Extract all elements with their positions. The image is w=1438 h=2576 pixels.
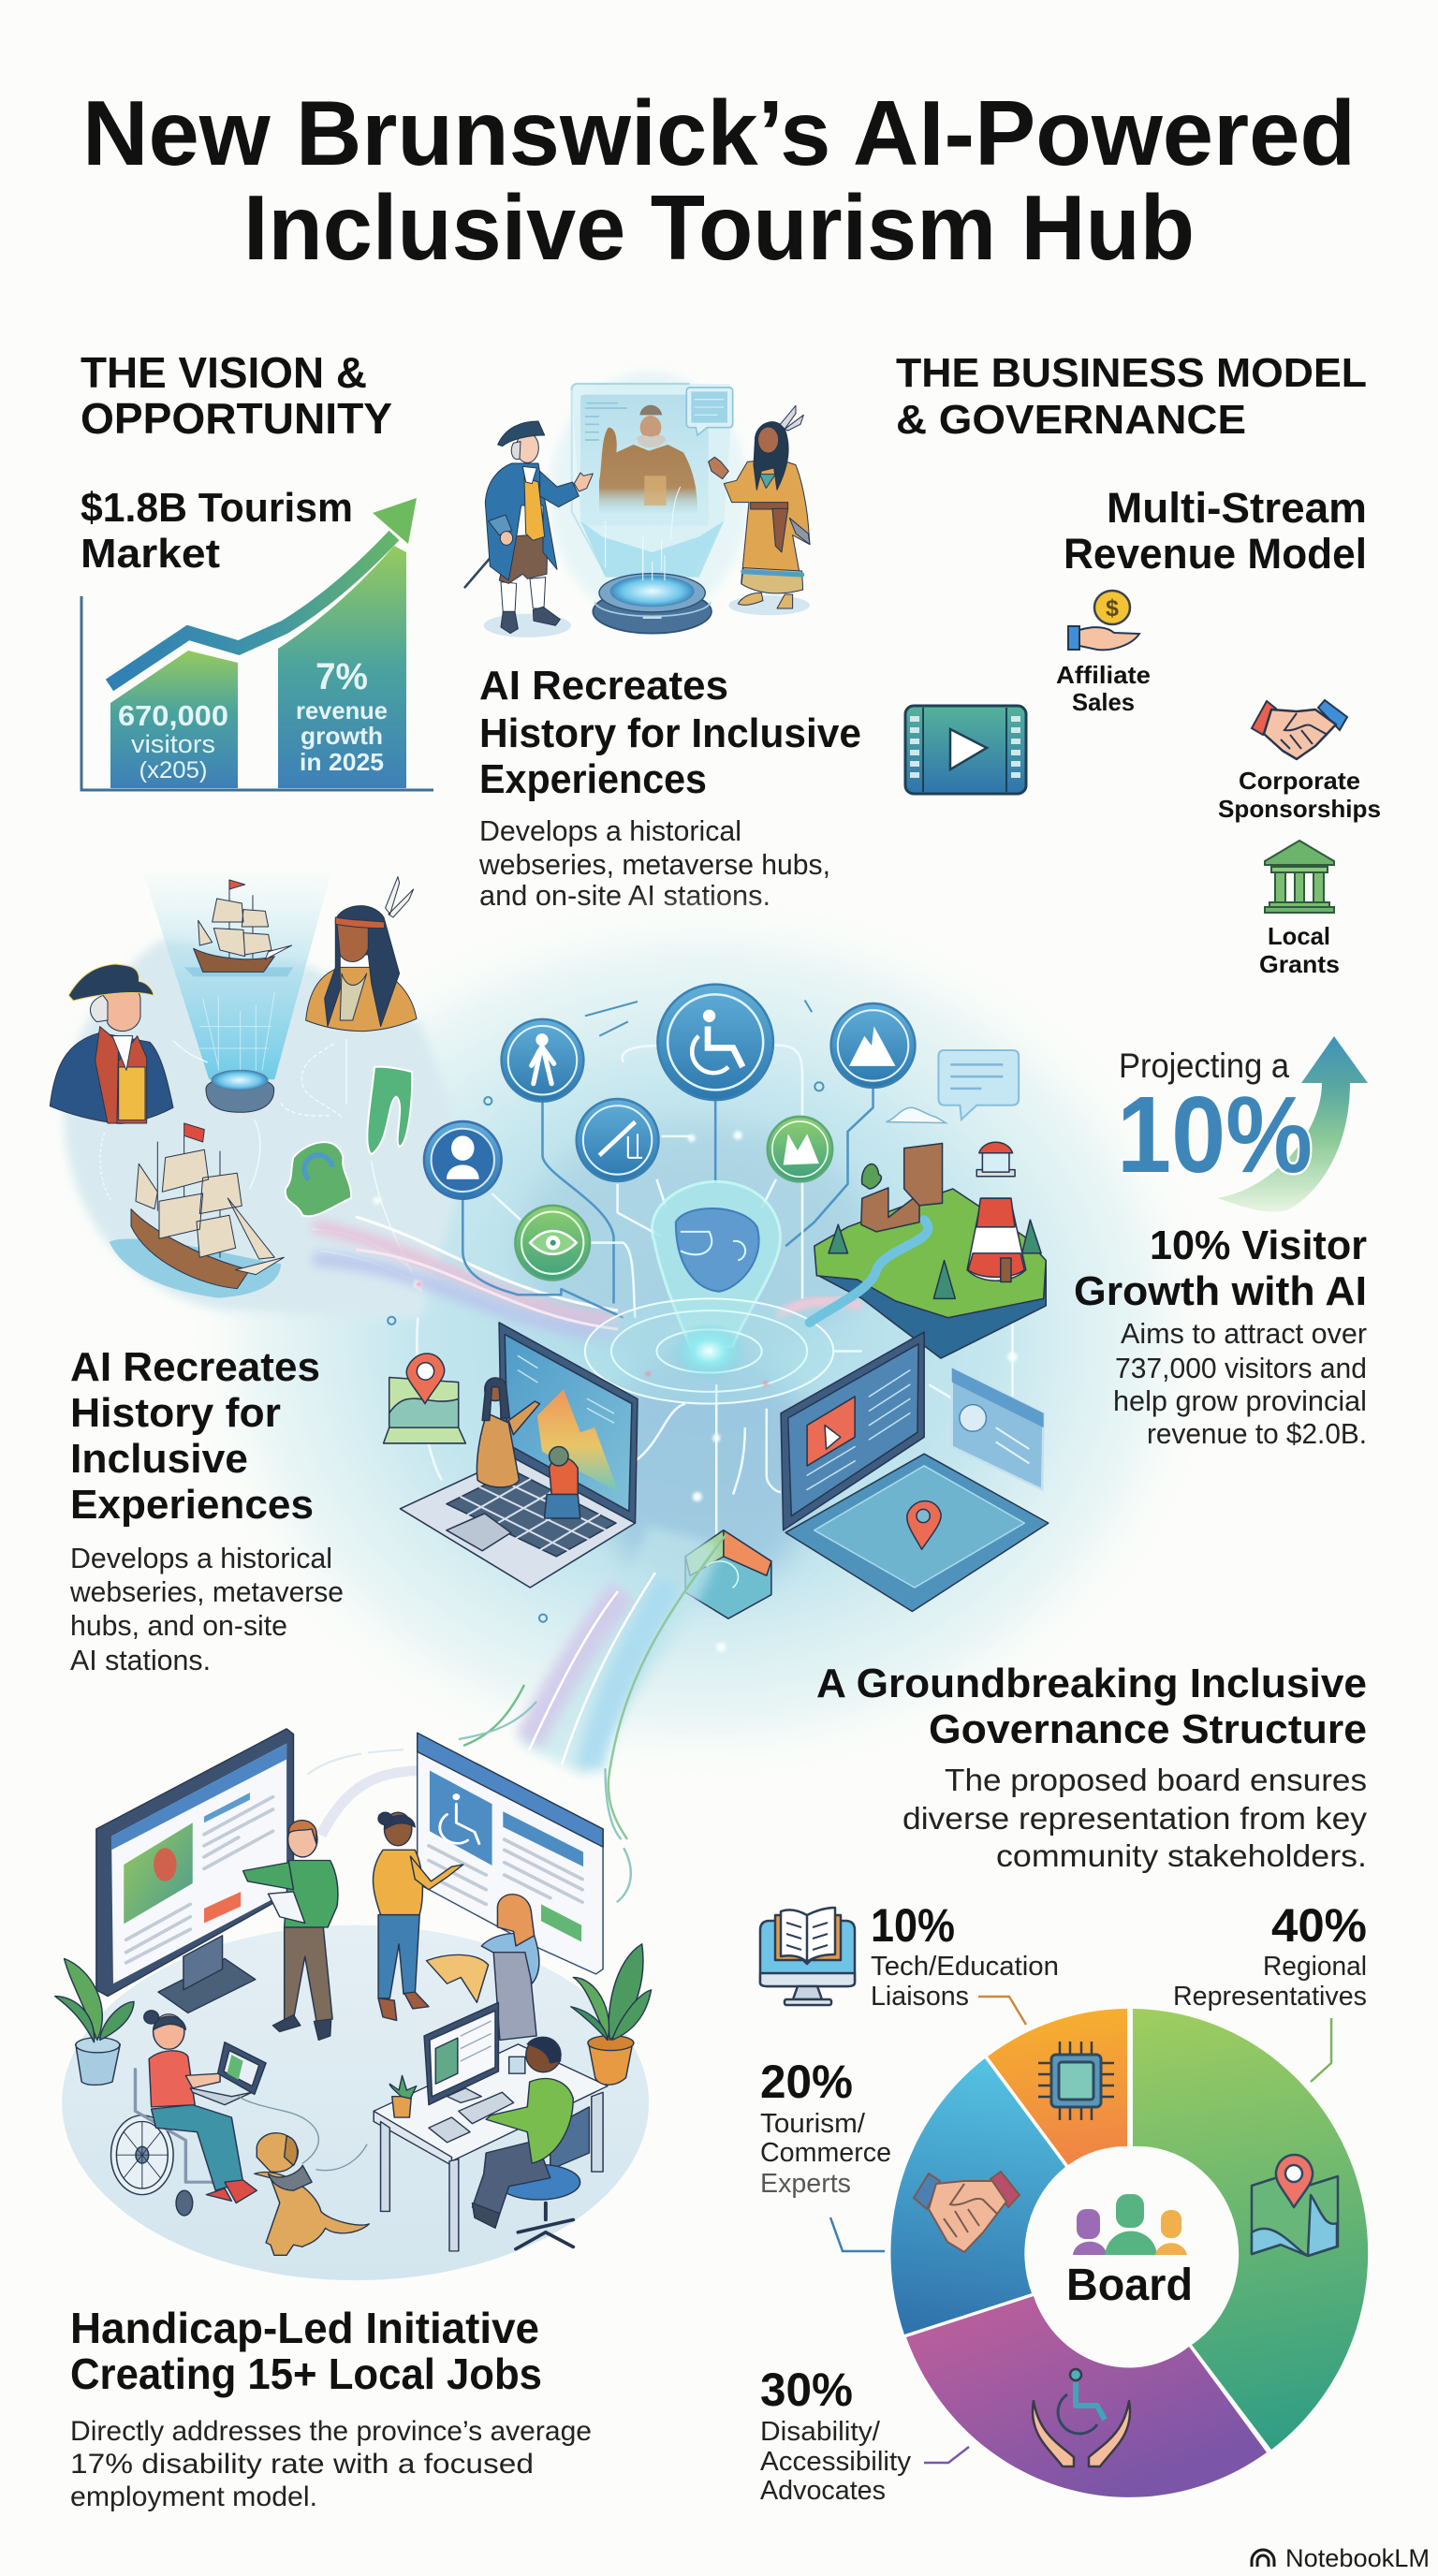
heading and text: AI recreates history (left): AI stations. xyxy=(70,1644,211,1676)
callout: projecting 10 percent: Projecting a xyxy=(1119,1046,1289,1085)
speech bubble xyxy=(938,1050,1019,1120)
label: affiliate sales: Sales xyxy=(1072,688,1135,716)
heading and text: visitor growth: Growth with AI xyxy=(1074,1268,1367,1314)
leader line: tech and education xyxy=(978,1997,1026,2025)
person: seated man at desk xyxy=(472,2037,589,2249)
center board icon and label: Board xyxy=(1066,2261,1193,2310)
left laptop xyxy=(400,1323,638,1588)
person: woman with cloth xyxy=(427,1895,539,2040)
label: 20 percent tourism and commerce: Experts xyxy=(760,2169,851,2199)
illustration: inclusive team workspace xyxy=(55,1702,652,2280)
heading and text: visitor growth: Aims to attract over xyxy=(1121,1317,1367,1350)
background bubble xyxy=(64,939,468,1320)
illustration: AI hub network xyxy=(374,985,1049,1652)
heading and text: handicap-led initiative: Creating 15+ Local Jobs xyxy=(70,2349,542,2398)
hologram projection xyxy=(550,372,749,634)
NotebookLM logo: NotebookLM xyxy=(1285,2544,1430,2572)
label: revenue growth: revenue xyxy=(296,696,388,724)
heading: tourism market: $1.8B Tourism xyxy=(81,485,353,531)
person: woman in yellow xyxy=(373,1812,463,2020)
central rings xyxy=(585,1298,833,1404)
label: 20 percent tourism and commerce xyxy=(760,2056,891,2199)
slice: regional representatives 40% xyxy=(1133,2009,1368,2450)
heading and text: AI recreates history (left): AI Recreates xyxy=(70,1344,320,1390)
icon circle: wheelchair access xyxy=(657,985,773,1100)
label: 20 percent tourism and commerce: Commerce xyxy=(760,2138,891,2168)
chart: tourism market growth xyxy=(81,498,433,790)
heading and text: governance structure: The proposed board ensures xyxy=(945,1763,1367,1797)
heading: the vision and opportunity xyxy=(81,348,392,443)
icon: hands with wheelchair xyxy=(1033,2369,1130,2466)
chart: board composition donut xyxy=(890,2009,1368,2497)
label: 30 percent disability advocates: Accessibility xyxy=(760,2447,912,2477)
heading and text: AI recreates history (top): AI Recreates xyxy=(479,663,728,709)
label: 30 percent disability advocates xyxy=(760,2364,912,2506)
heading: tourism market xyxy=(81,485,353,577)
bar: revenue growth xyxy=(278,546,406,788)
person: man with clipboard xyxy=(243,1821,338,2040)
portrait: Indigenous man xyxy=(306,877,417,1032)
label: 40 percent regional representatives xyxy=(1173,1899,1367,2012)
icon: microchip xyxy=(1038,2042,1114,2120)
bar: visitors xyxy=(110,651,238,788)
illustration: historic scene xyxy=(50,873,468,1320)
heading and text: handicap-led initiative: Directly addresses the province’s average xyxy=(70,2416,592,2447)
circuit connector lines xyxy=(417,1046,1013,1575)
callout: projecting 10 percent xyxy=(1117,1036,1368,1212)
dashed route lines xyxy=(100,1039,421,1292)
heading: multi-stream revenue model xyxy=(1064,484,1367,578)
icon: book on monitor xyxy=(760,1908,855,2005)
hologram beam xyxy=(143,873,330,1079)
slice: tech and education liaisons 10% xyxy=(988,2009,1127,2165)
heading and text: visitor growth: 10% Visitor xyxy=(1150,1222,1367,1268)
plant: right xyxy=(571,1944,652,2085)
heading and text: AI recreates history (left): webseries, metaverse xyxy=(69,1575,344,1608)
heading and text: governance structure: Governance Structure xyxy=(929,1706,1367,1752)
heading and text: governance structure xyxy=(816,1661,1368,1873)
heading and text: handicap-led initiative xyxy=(70,2304,592,2512)
label: 40 percent regional representatives: 40% xyxy=(1271,1899,1367,1952)
label: affiliate sales: Affiliate xyxy=(1056,661,1151,689)
icon: handshake xyxy=(914,2172,1020,2252)
title: New Brunswick’s AI-Powered xyxy=(82,81,1356,184)
leader line: regional representatives xyxy=(1311,2018,1331,2082)
label: local grants: Local xyxy=(1268,922,1330,950)
icon: folded map with pin xyxy=(1252,2155,1338,2256)
icon: affiliate sales coin and hand xyxy=(1068,591,1139,650)
heading: multi-stream revenue model: Multi-Stream xyxy=(1107,484,1367,532)
label: corporate sponsorships: Sponsorships xyxy=(1218,795,1381,823)
label: 20 percent tourism and commerce: Tourism/ xyxy=(760,2109,866,2139)
person: wheelchair user with laptop xyxy=(111,2011,266,2216)
decorative dots xyxy=(388,1000,823,1622)
heading and text: handicap-led initiative: employment model. xyxy=(70,2481,317,2512)
heading and text: AI recreates history (left) xyxy=(69,1344,344,1676)
map fragments xyxy=(286,1067,412,1216)
illustration: colonial man, hologram elder and Indigenous woman xyxy=(465,372,810,637)
heading and text: visitor growth: help grow provincial xyxy=(1113,1384,1367,1417)
large monitor xyxy=(96,1729,293,2012)
profile card xyxy=(952,1368,1044,1489)
workstation desk xyxy=(374,2002,608,2251)
cloud xyxy=(886,1107,946,1123)
label: 40 percent regional representatives: Representatives xyxy=(1173,1982,1367,2012)
figure: Indigenous woman xyxy=(709,405,810,615)
label: visitors: (x205) xyxy=(139,757,208,783)
heading and text: AI recreates history (top) xyxy=(478,663,861,912)
arrow: growth trend xyxy=(110,498,417,685)
slice: tourism and commerce experts 20% xyxy=(890,2058,1065,2334)
small sailing ship xyxy=(184,880,293,976)
label: revenue growth xyxy=(296,656,388,776)
arrow: upward growth xyxy=(1217,1036,1368,1212)
heading: the vision and opportunity: THE VISION & xyxy=(81,348,367,397)
heading: multi-stream revenue model: Revenue Model xyxy=(1064,530,1367,578)
heading and text: AI recreates history (top): Experiences xyxy=(479,756,707,802)
label: 40 percent regional representatives: Regional xyxy=(1263,1952,1367,1982)
label: corporate sponsorships: Corporate xyxy=(1239,767,1360,795)
heading and text: AI recreates history (left): Experiences xyxy=(70,1482,314,1528)
slice: disability advocates 30% xyxy=(906,2296,1267,2497)
label: 30 percent disability advocates: 30% xyxy=(760,2364,853,2416)
heading and text: visitor growth: revenue to $2.0B. xyxy=(1147,1417,1367,1450)
heading: business model and governance xyxy=(896,350,1367,443)
label: 30 percent disability advocates: Advocates xyxy=(760,2476,886,2506)
heading and text: handicap-led initiative: Handicap-Led Initiative xyxy=(70,2304,539,2352)
icon: local grants building xyxy=(1265,841,1334,913)
speech bubble xyxy=(686,388,733,435)
heading and text: AI recreates history (left): Develops a historical xyxy=(70,1542,332,1574)
label: local grants: Grants xyxy=(1259,950,1340,978)
floor xyxy=(62,1925,649,2280)
heading and text: AI recreates history (top): History for Inclusive xyxy=(479,710,861,756)
label: local grants xyxy=(1259,922,1340,978)
callout: projecting 10 percent: 10% xyxy=(1117,1074,1313,1195)
label: 30 percent disability advocates: Disability/ xyxy=(760,2417,881,2447)
heading and text: visitor growth xyxy=(1074,1222,1367,1450)
large sailing ship xyxy=(110,1123,284,1298)
label: corporate sponsorships xyxy=(1218,767,1381,823)
heading and text: AI recreates history (left): hubs, and on-site xyxy=(70,1609,287,1642)
label: 10 percent tech and education xyxy=(871,1899,1059,2012)
heading and text: visitor growth: 737,000 visitors and xyxy=(1115,1352,1367,1384)
figure: child on laptop xyxy=(550,1457,578,1495)
heading and text: governance structure: A Groundbreaking Inclusive xyxy=(816,1661,1367,1706)
leader line: tourism and commerce xyxy=(830,2217,885,2251)
icon: affiliate sales coin and hand: $ xyxy=(1106,595,1119,622)
plant: left xyxy=(55,1958,134,2085)
leader line: disability advocates xyxy=(924,2447,969,2463)
heading and text: governance structure: community stakeholders. xyxy=(996,1838,1367,1873)
flowing data streams to the team xyxy=(463,1535,726,1839)
heading: business model and governance: THE BUSINESS MODEL xyxy=(896,350,1367,396)
streams of colour flowing into the hub xyxy=(314,1217,861,1334)
floating island with castle and lighthouse xyxy=(810,1142,1046,1358)
center board icon and label xyxy=(1066,2194,1193,2310)
heading and text: AI recreates history (left): History for xyxy=(70,1390,281,1436)
heading and text: governance structure: diverse representation from key xyxy=(902,1801,1368,1836)
right laptop xyxy=(781,1332,1049,1612)
label: visitors: 670,000 xyxy=(118,699,228,732)
icon circle: eye xyxy=(515,1206,590,1280)
central background glow xyxy=(178,889,1226,1788)
label: visitors xyxy=(118,699,228,783)
label: affiliate sales xyxy=(1056,661,1151,716)
figure: woman on laptop xyxy=(477,1413,519,1487)
icon circle: green mountain xyxy=(768,1117,832,1181)
label: visitors: visitors xyxy=(131,730,215,758)
AI head hologram xyxy=(652,1181,780,1346)
label: 20 percent tourism and commerce: 20% xyxy=(760,2056,853,2108)
label: 10 percent tech and education: 10% xyxy=(871,1899,955,1952)
label: revenue growth: 7% xyxy=(315,656,368,697)
label: 10 percent tech and education: Tech/Education xyxy=(871,1952,1059,1982)
label: 10 percent tech and education: Liaisons xyxy=(871,1982,969,2012)
hologram base xyxy=(593,536,712,634)
icon circle: walking person xyxy=(502,1019,583,1102)
large browser panel xyxy=(418,1733,603,1974)
title xyxy=(82,81,1356,279)
decorative arcs xyxy=(307,1702,631,1902)
title: Inclusive Tourism Hub xyxy=(243,176,1195,279)
heading and text: AI recreates history (top): and on-site AI stations. xyxy=(479,879,770,912)
icon: corporate handshake xyxy=(1252,700,1347,759)
heading: business model and governance: & GOVERNANCE xyxy=(896,397,1246,443)
label: revenue growth: growth xyxy=(301,722,383,750)
icon: video player xyxy=(905,706,1026,794)
hologram base xyxy=(206,1070,274,1112)
heading and text: AI recreates history (top): webseries, metaverse hubs, xyxy=(478,848,830,881)
figure: colonial man xyxy=(465,421,593,637)
heading and text: AI recreates history (left): Inclusive xyxy=(70,1436,248,1482)
heading and text: AI recreates history (top): Develops a historical xyxy=(479,814,741,847)
guide dog xyxy=(239,2097,369,2255)
small data cube xyxy=(685,1530,771,1618)
icon circle: person xyxy=(424,1121,502,1199)
heading and text: handicap-led initiative: 17% disability rate with a focused xyxy=(70,2449,534,2480)
map pin card xyxy=(384,1354,465,1443)
label: revenue growth: in 2025 xyxy=(300,748,384,776)
icon circle: tools xyxy=(577,1099,658,1181)
icon circle: landscape xyxy=(831,1003,915,1088)
heading: the vision and opportunity: OPPORTUNITY xyxy=(81,394,392,443)
heading: tourism market: Market xyxy=(81,531,220,577)
glowing nodes xyxy=(374,1131,1018,1652)
portrait: colonial man xyxy=(50,964,173,1123)
